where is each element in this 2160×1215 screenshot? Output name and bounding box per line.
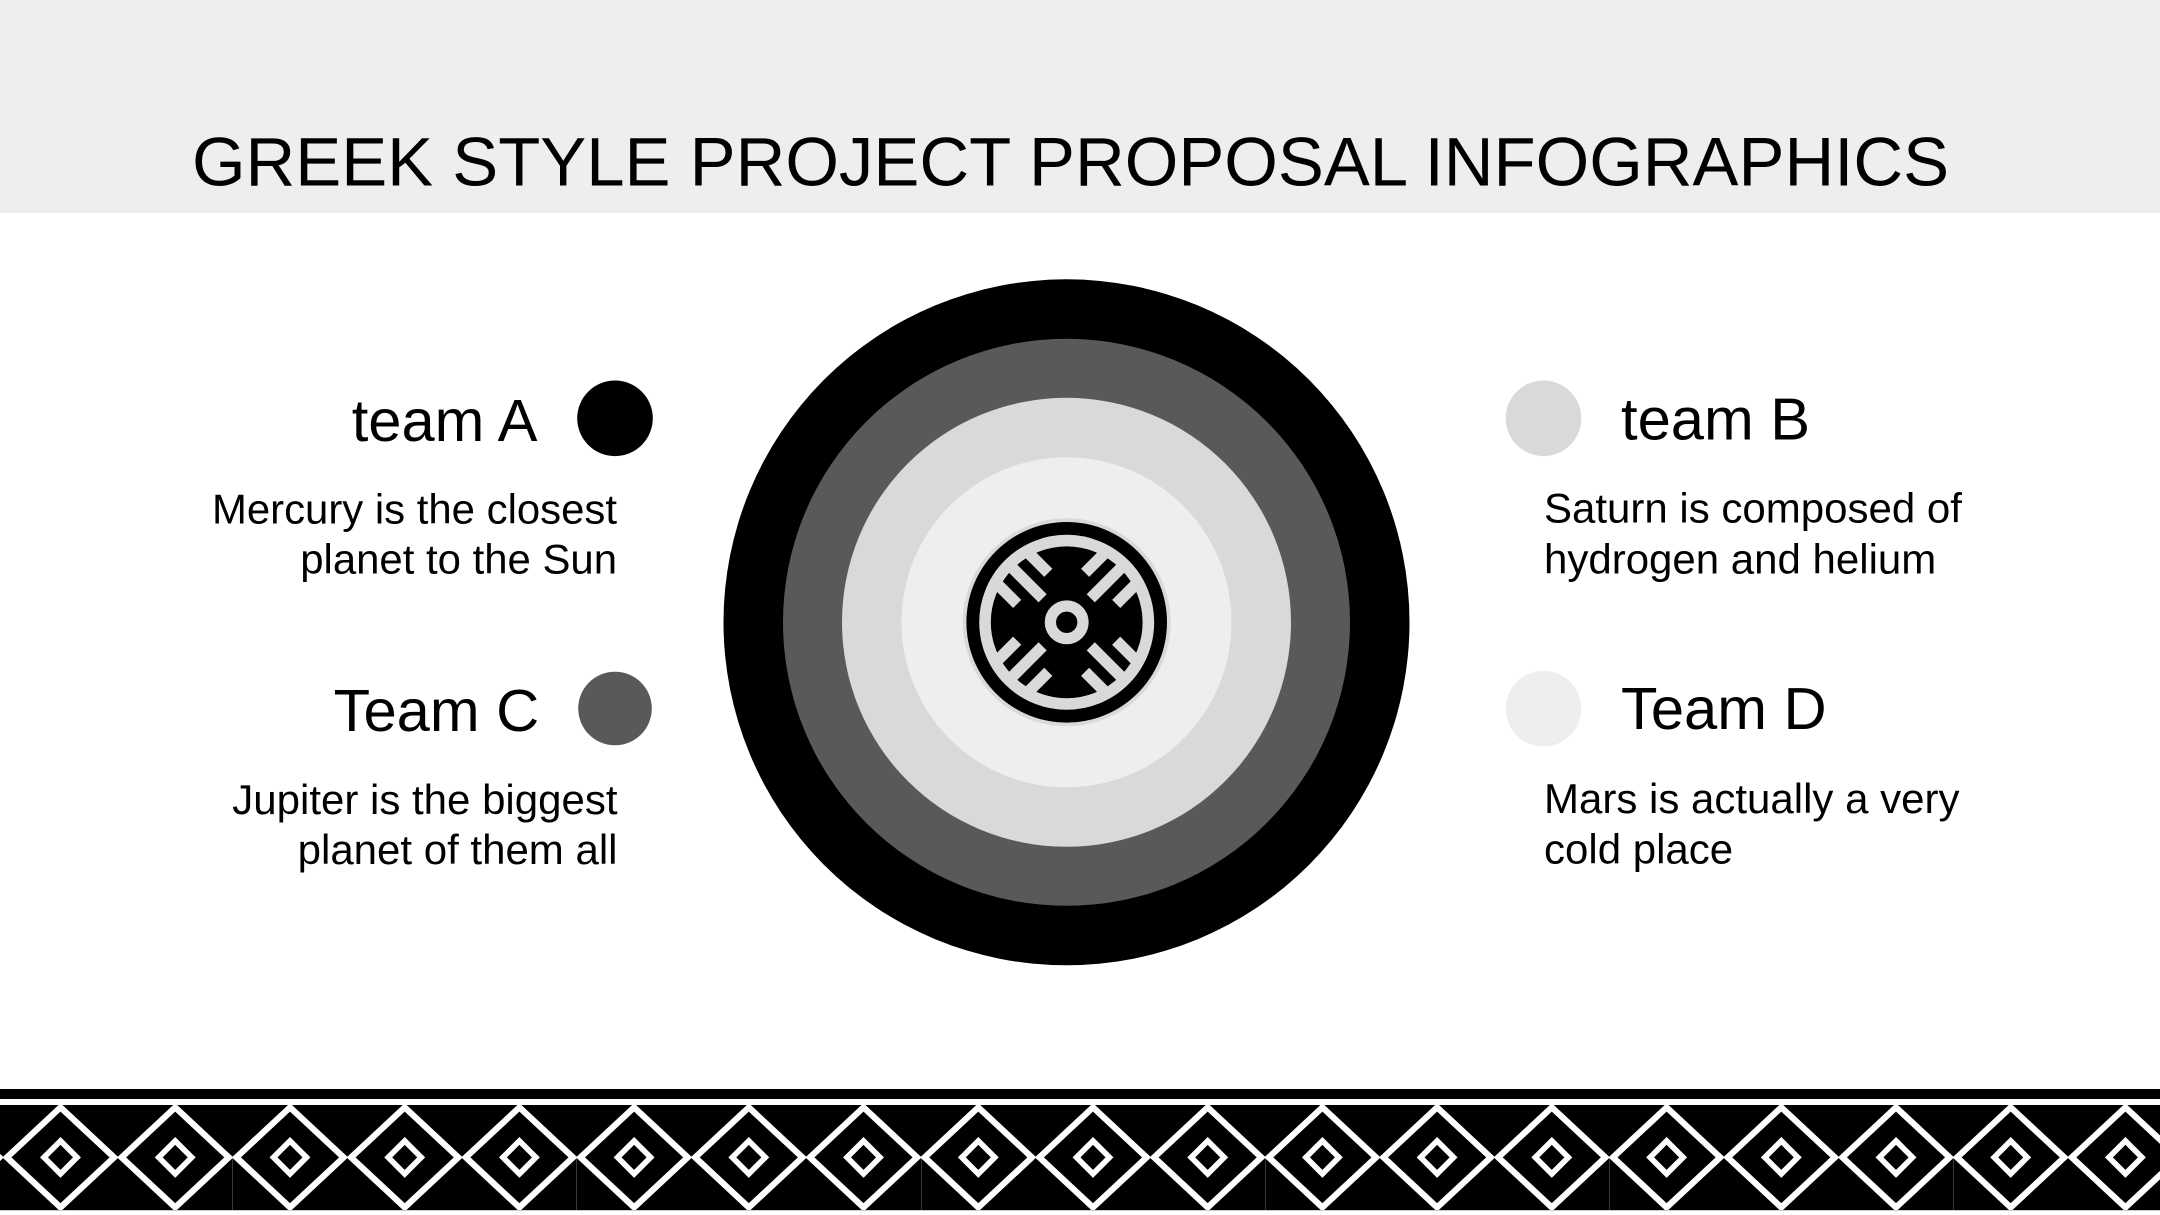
title: GREEK STYLE PROJECT PROPOSAL INFOGRAPHICS <box>192 124 1949 201</box>
team A heading: team A <box>352 387 538 454</box>
panel: team B <box>1506 380 1962 582</box>
greek key border band <box>0 1089 2160 1211</box>
concentric circle chart <box>724 279 1410 965</box>
team C marker <box>578 672 652 745</box>
team D description: Mars is actually a very <box>1544 775 1959 822</box>
panel: team D <box>1506 671 1959 872</box>
team D description: cold place <box>1544 826 1733 872</box>
panel: team C <box>232 672 652 873</box>
team D heading: Team D <box>1621 675 1827 742</box>
team A marker <box>577 380 653 456</box>
team A description: Mercury is the closest <box>212 486 617 532</box>
team C description: Jupiter is the biggest <box>232 776 618 823</box>
team C heading: Team C <box>334 677 539 744</box>
team C description: planet of them all <box>298 826 618 873</box>
team B description: hydrogen and helium <box>1544 535 1936 582</box>
team A description: planet to the Sun <box>300 536 617 582</box>
team D marker <box>1506 671 1581 746</box>
panel: team A <box>212 380 653 582</box>
team B heading: team B <box>1621 385 1810 452</box>
team B marker <box>1506 380 1581 456</box>
team B description: Saturn is composed of <box>1544 485 1962 532</box>
icon: greek wheel emblem <box>963 518 1171 726</box>
header band <box>0 0 2160 213</box>
